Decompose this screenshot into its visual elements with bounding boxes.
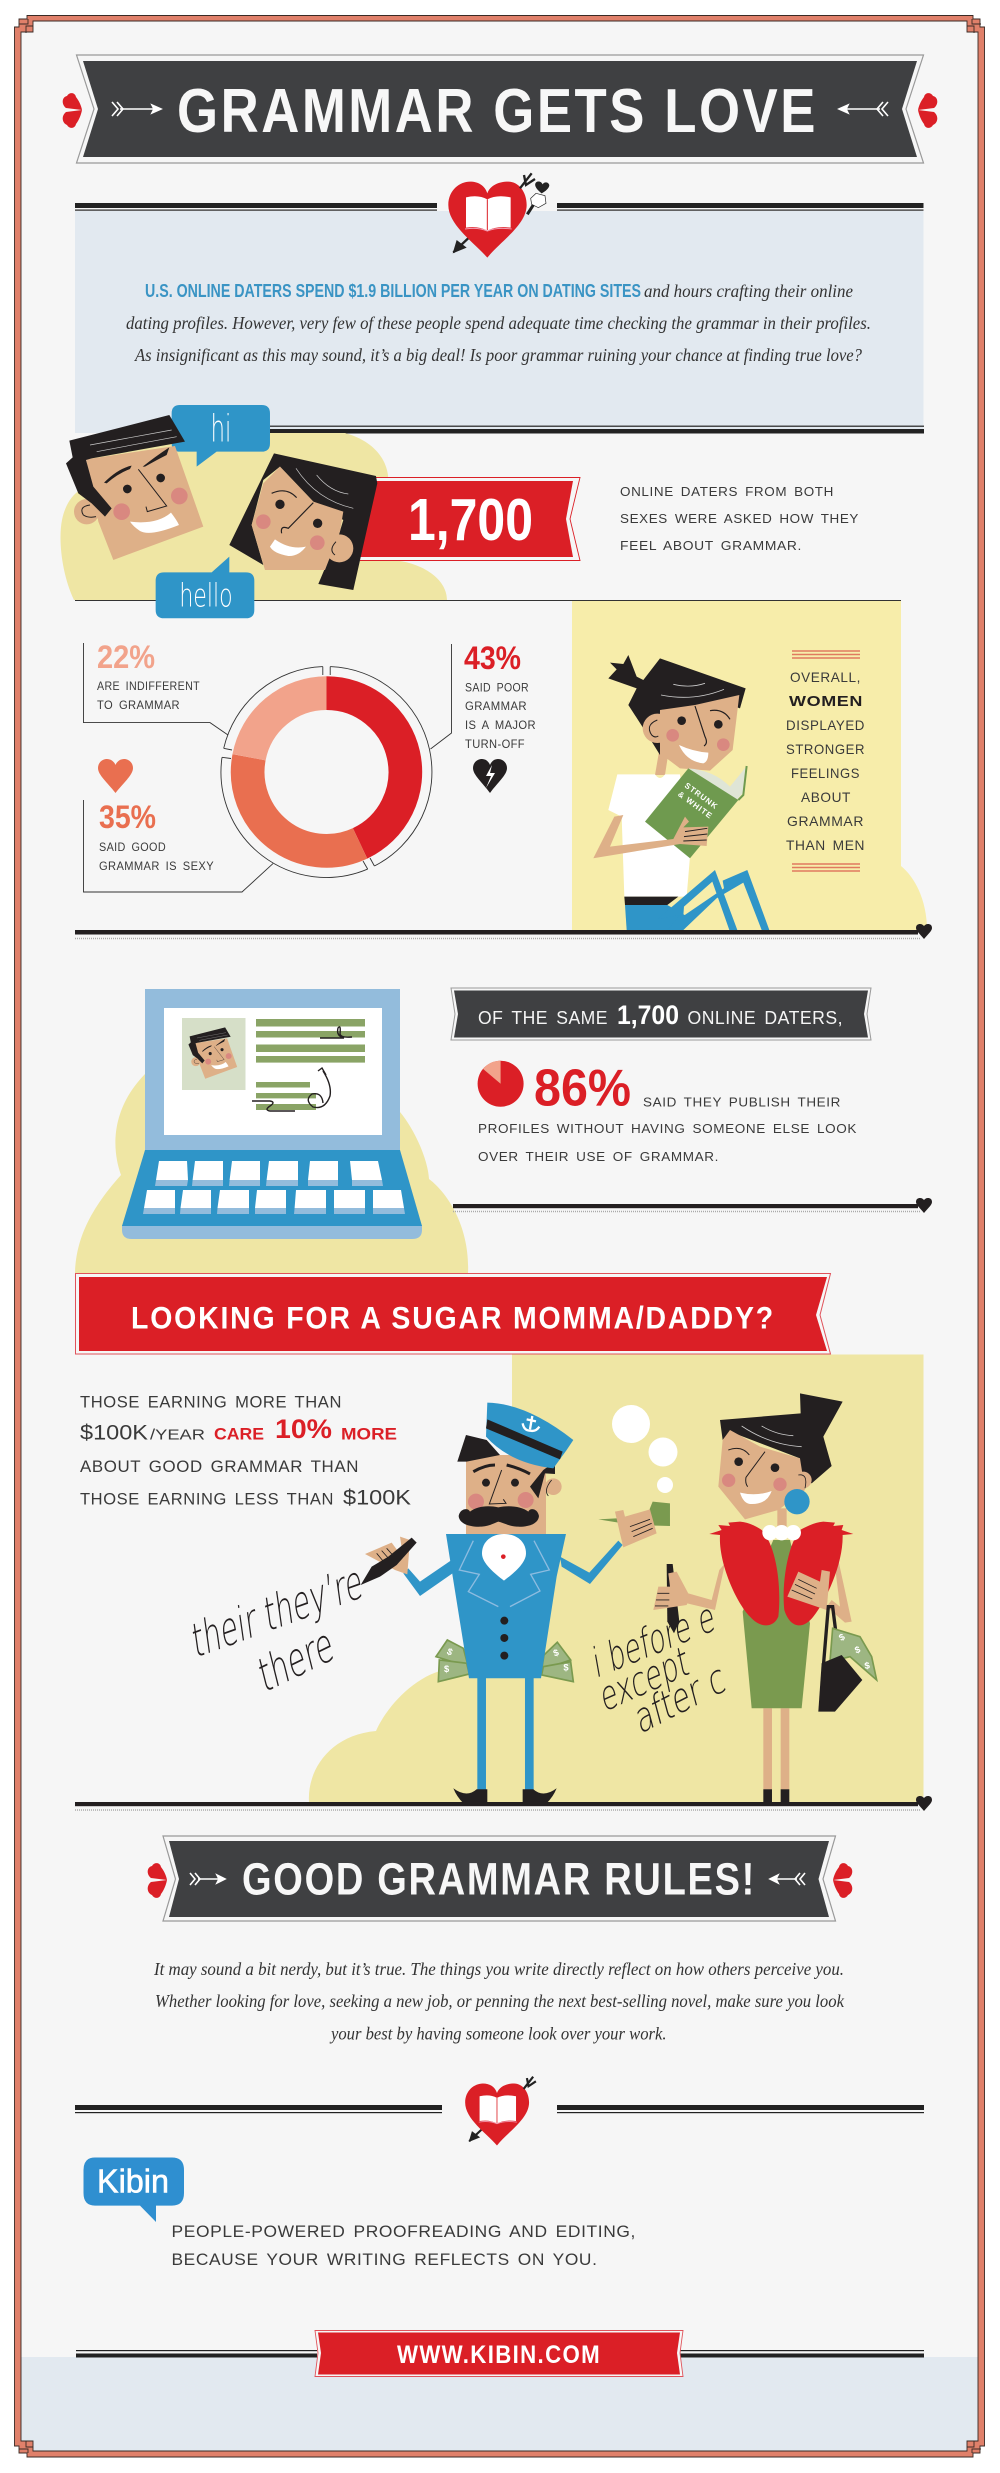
icon: left title ornament <box>63 93 82 128</box>
logo: Kibin <box>84 2158 184 2222</box>
icon: anchor <box>523 1416 539 1431</box>
speech bubble: hello: hello <box>179 579 233 615</box>
banner text: GOOD GRAMMAR RULES! <box>242 1853 756 1904</box>
stat description <box>478 1094 857 1164</box>
closing paragraph: your best by having someone look over your work. <box>329 2024 666 2044</box>
text: earnings stat: ABOUT GOOD GRAMMAR THAN <box>80 1458 359 1476</box>
icon: left arrow <box>112 102 161 116</box>
icon: right arrow <box>839 102 888 116</box>
label: 43%: IS A MAJOR <box>465 720 536 732</box>
icon: right title ornament <box>918 93 937 128</box>
illustration: girl reading: & WHITE <box>676 790 714 821</box>
text: earnings stat: 10% <box>275 1414 332 1444</box>
stat: 86%: 86% <box>534 1060 631 1118</box>
keyboard keys <box>143 1161 405 1214</box>
icon: left arrow <box>190 1873 225 1885</box>
closing paragraph <box>153 1959 845 2044</box>
label: 35%: GRAMMAR IS SEXY <box>99 861 214 873</box>
divider with heart <box>75 2077 924 2146</box>
handwriting: after c: after c <box>630 1652 730 1744</box>
icon: heart with book <box>465 2077 536 2146</box>
panel: intro <box>75 203 924 434</box>
banner: sugar momma/daddy: LOOKING FOR A SUGAR MOMMA/DADDY? <box>131 1300 775 1336</box>
women text: FEELINGS <box>791 765 860 781</box>
icon: right ornament <box>833 1863 852 1898</box>
illustration: girl reading <box>593 655 769 930</box>
illustration: thought bubbles <box>612 1405 678 1493</box>
proofreading marks <box>252 1027 352 1111</box>
women text <box>786 669 865 853</box>
money left <box>436 1640 469 1682</box>
label: 22%: TO GRAMMAR <box>97 700 180 712</box>
intro line 3: As insignificant as this may sound, it’s a big deal! Is poor grammar ruining your chance at finding true love? <box>134 345 862 365</box>
profile photo <box>182 1018 246 1090</box>
text: earnings stat: /YEAR <box>150 1427 205 1443</box>
icon: left ornament <box>148 1863 167 1898</box>
number: 1,700 <box>408 487 533 553</box>
label: 22%: ARE INDIFFERENT <box>97 681 200 693</box>
banner: sugar momma/daddy <box>76 1274 830 1354</box>
thin divider and respondents text <box>75 484 901 601</box>
stat description: SAID THEY PUBLISH THEIR <box>643 1094 841 1109</box>
divider with heart end <box>75 924 932 939</box>
women text: STRONGER <box>786 741 865 757</box>
speech bubble: hi: hi <box>211 407 231 451</box>
banner: of the same 1,700: ONLINE DATERS, <box>688 1008 843 1028</box>
label: 35%: 35% <box>99 799 156 835</box>
decorative triple rule top <box>792 651 860 658</box>
panel: donut chart <box>84 639 536 892</box>
icon: right arrow <box>770 1873 805 1885</box>
illustration: woman with fur <box>653 1393 877 1803</box>
text: earnings stat: CARE <box>214 1424 264 1443</box>
handwriting: there: there <box>253 1616 339 1704</box>
label: 22% <box>97 639 200 712</box>
closing paragraph: It may sound a bit nerdy, but it’s true. The things you write directly reflect on how others perceive you. <box>153 1959 844 1979</box>
label: 35% <box>99 799 214 873</box>
thin divider and respondents text: FEEL ABOUT GRAMMAR. <box>620 538 802 553</box>
title text: GRAMMAR GETS LOVE <box>177 77 818 146</box>
banner: of the same 1,700: 1,700 <box>617 1000 679 1030</box>
label: 43%: 43% <box>464 640 521 676</box>
illustration: woman's face <box>229 453 377 590</box>
chart: 86% pie <box>478 1061 524 1107</box>
women text: THAN MEN <box>786 837 865 853</box>
icon: heart with book and arrow <box>448 173 549 258</box>
divider with heart end <box>453 1198 932 1213</box>
banner: 1,700 <box>360 478 580 560</box>
money right <box>542 1642 573 1682</box>
decorative triple rule bottom <box>792 864 860 871</box>
thin divider and respondents text: ONLINE DATERS FROM BOTH <box>620 484 834 499</box>
speech bubble: hi <box>172 405 270 467</box>
stat description: PROFILES WITHOUT HAVING SOMEONE ELSE LOOK <box>478 1121 857 1136</box>
illustration: woman with fur: $ <box>837 1631 847 1643</box>
icon: broken heart <box>473 759 507 793</box>
panel: women feelings <box>572 601 927 930</box>
women text: ABOUT <box>801 789 851 805</box>
text: earnings stat: THOSE EARNING LESS THAN <box>80 1490 334 1508</box>
handwriting: i before e: i before e <box>589 1591 718 1688</box>
women text: OVERALL, <box>790 669 861 685</box>
intro highlight text: U.S. ONLINE DATERS SPEND $1.9 BILLION PER YEAR ON DATING SITES <box>145 281 641 301</box>
illustration: man's face <box>66 415 203 560</box>
label: 43%: SAID POOR <box>465 682 529 694</box>
handwriting: their theyre: their they’re <box>189 1553 366 1669</box>
closing paragraph: Whether looking for love, seeking a new job, or penning the next best-selling novel, make sure you look <box>155 1991 845 2011</box>
intro line 1: and hours crafting their online <box>644 281 853 301</box>
money left: $ <box>444 1664 450 1674</box>
tagline: PEOPLE-POWERED PROOFREADING AND EDITING, <box>172 2222 636 2241</box>
women text: DISPLAYED <box>786 717 865 733</box>
handwriting: except: except <box>596 1636 693 1722</box>
divider with heart end <box>75 1796 932 1811</box>
illustration: girl reading: STRUNK <box>683 781 720 811</box>
label: 43% <box>464 640 536 751</box>
intro line 2: dating profiles. However, very few of these people spend adequate time checking the grammar in their profiles. <box>126 313 871 333</box>
money left: $ <box>445 1646 455 1658</box>
banner: of the same 1,700 <box>451 988 871 1040</box>
text: earnings stat <box>80 1394 411 1510</box>
text: earnings stat: $100K <box>343 1486 411 1510</box>
logo: Kibin: Kibin <box>97 2163 169 2200</box>
label: 22%: 22% <box>97 639 155 675</box>
label: 35%: SAID GOOD <box>99 842 166 854</box>
money right: $ <box>563 1663 569 1673</box>
text: earnings stat: MORE <box>341 1424 397 1443</box>
illustration: yellow blob behind laptop <box>75 1074 468 1273</box>
illustration: woman with fur: $ <box>853 1644 862 1655</box>
women text: WOMEN <box>789 693 863 710</box>
text: earnings stat: THOSE EARNING MORE THAN <box>80 1394 342 1412</box>
label: 43%: TURN-OFF <box>465 739 525 751</box>
illustration: woman with fur: $ <box>864 1660 871 1671</box>
illustration: man with cap <box>361 1403 670 1803</box>
donut outer ring and leader lines <box>84 643 452 892</box>
thin divider and respondents text: SEXES WERE ASKED HOW THEY <box>620 511 859 526</box>
tagline <box>172 2222 636 2269</box>
footer rules <box>76 2350 924 2358</box>
banner: good grammar rules <box>163 1836 836 1921</box>
profile face <box>188 1027 237 1079</box>
illustration: yellow blob behind faces <box>60 433 447 600</box>
text: earnings stat: $100K <box>80 1421 148 1444</box>
icon: orange heart <box>98 759 133 793</box>
profile text lines <box>256 1019 365 1110</box>
banner: website: WWW.KIBIN.COM <box>397 2341 601 2369</box>
title banner <box>76 55 924 163</box>
tagline: BECAUSE YOUR WRITING REFLECTS ON YOU. <box>172 2250 598 2269</box>
banner: website <box>315 2330 683 2376</box>
money right: $ <box>552 1647 561 1658</box>
illustration: yellow background for couple <box>309 1354 924 1802</box>
label: 43%: GRAMMAR <box>465 701 527 713</box>
women text: GRAMMAR <box>787 813 864 829</box>
speech bubble: hello <box>156 557 254 618</box>
donut segments <box>248 693 405 851</box>
illustration: laptop <box>122 989 422 1239</box>
banner: of the same 1,700: OF THE SAME <box>478 1008 608 1028</box>
stat description: OVER THEIR USE OF GRAMMAR. <box>478 1149 719 1164</box>
